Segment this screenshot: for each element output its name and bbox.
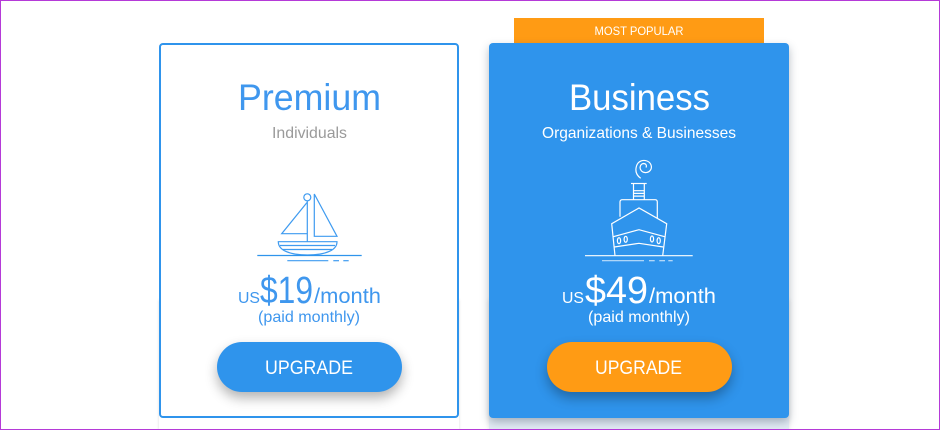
panel: premium card (159, 43, 459, 418)
button: premium upgrade (217, 342, 402, 392)
business heading (542, 77, 736, 142)
premium price: /month (314, 285, 381, 308)
business heading: Business (569, 77, 710, 118)
premium price: (paid monthly) (258, 309, 360, 326)
button: business upgrade (547, 342, 732, 392)
most popular label: MOST POPULAR (594, 24, 684, 38)
business price (562, 270, 716, 326)
business price: /month (649, 285, 716, 308)
business price: US (562, 290, 584, 307)
premium price: US (238, 290, 260, 307)
business price: $49 (585, 270, 648, 312)
business subtitle: Organizations & Businesses (542, 125, 736, 142)
premium subtitle: Individuals (272, 125, 347, 142)
premium price: $19 (260, 270, 313, 312)
business price: (paid monthly) (588, 309, 690, 326)
premium heading: Premium (238, 77, 381, 118)
business button label: UPGRADE (595, 358, 682, 379)
panel: business card (489, 43, 789, 418)
premium heading (238, 77, 381, 142)
premium price (238, 270, 381, 326)
premium button label: UPGRADE (265, 358, 353, 379)
banner: most popular (514, 18, 764, 43)
icon: sailboat (257, 194, 362, 261)
icon: ship (585, 160, 693, 261)
